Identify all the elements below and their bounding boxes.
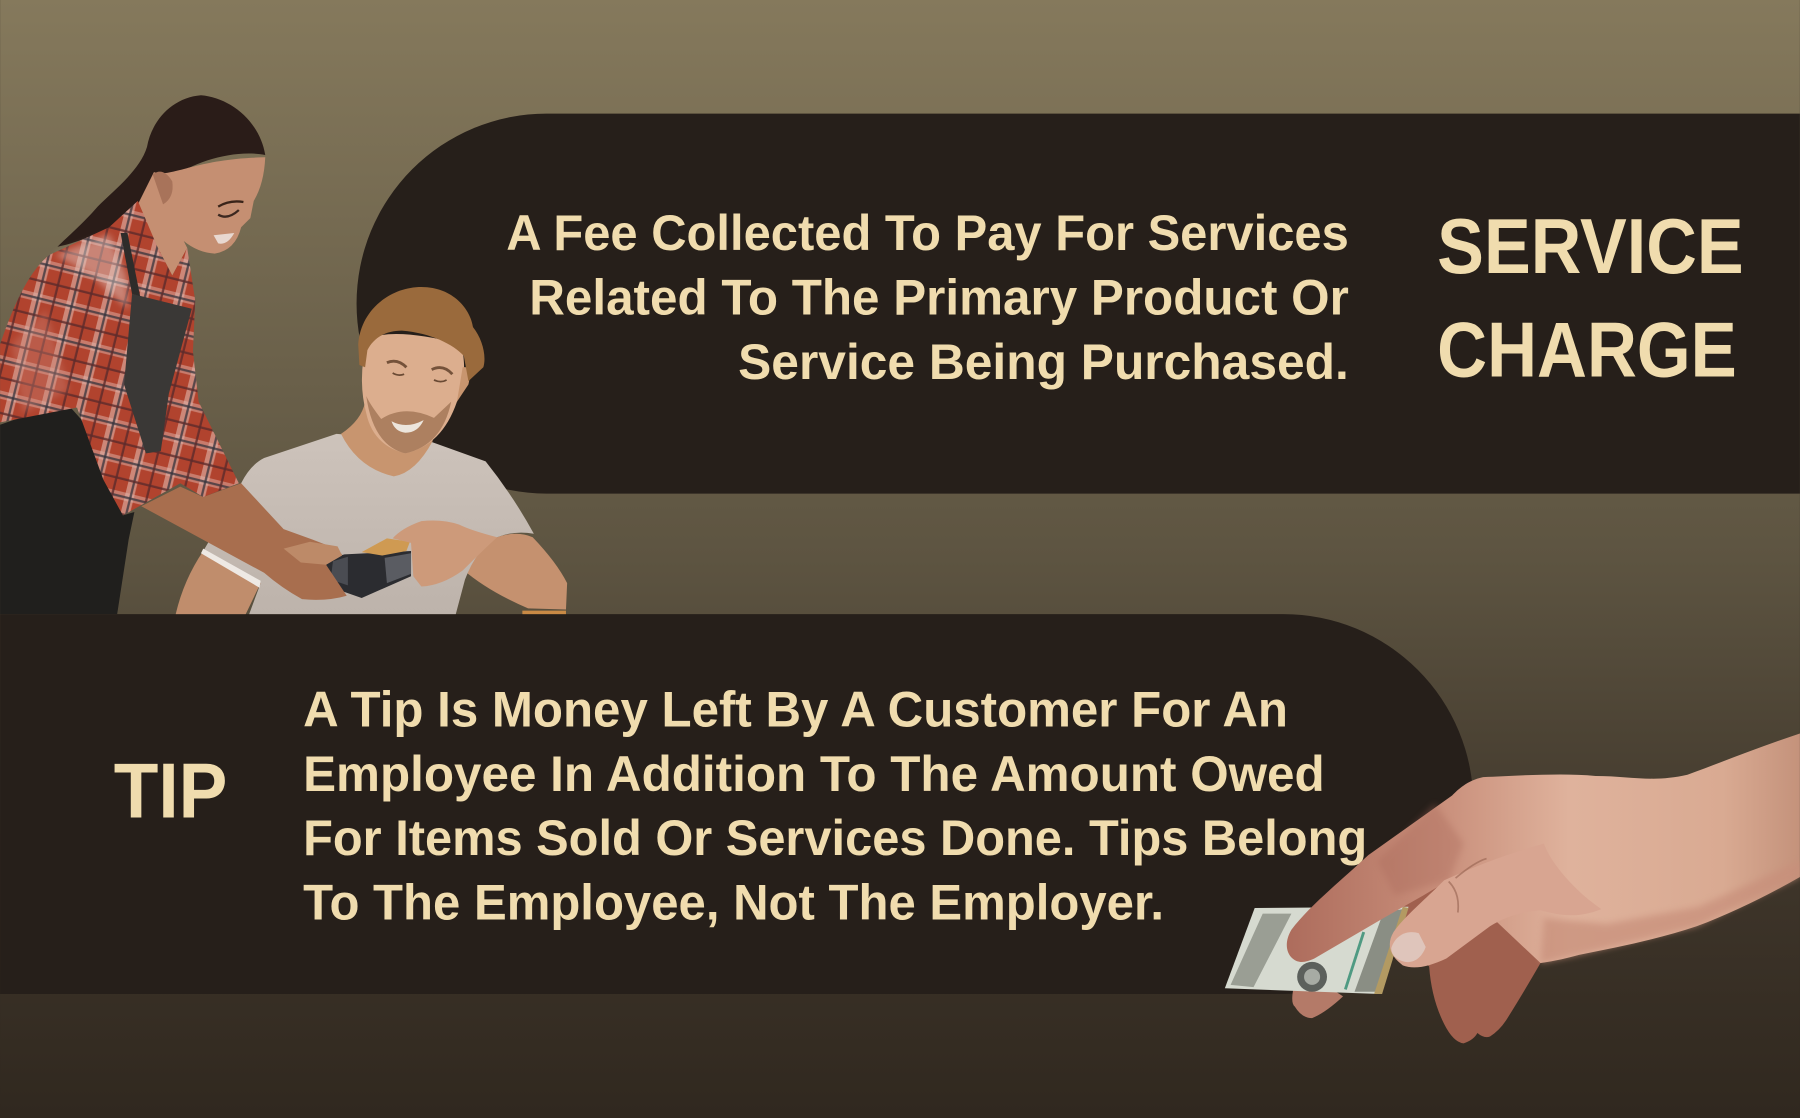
- text block: tip definition: A Tip Is Money Left By A Customer For An: [303, 681, 1288, 738]
- back of hand and index finger: [1287, 733, 1800, 967]
- apron lower: [0, 402, 134, 614]
- card reader: [312, 538, 411, 598]
- forearms: [141, 483, 347, 600]
- lower fingers: [1292, 884, 1578, 1043]
- heading: service charge: [1437, 202, 1744, 393]
- apron bib: [124, 294, 192, 453]
- text block: service charge definition: Service Being Purchased.: [738, 333, 1349, 390]
- palm shadow: [1540, 861, 1800, 963]
- ponytail and hair: [57, 95, 265, 247]
- thumb: [1390, 844, 1601, 967]
- text block: tip definition: [303, 681, 1367, 930]
- text block: service charge definition: A Fee Collected To Pay For Services: [506, 204, 1349, 261]
- text block: tip definition: To The Employee, Not The Employer.: [303, 873, 1164, 930]
- man's hand: [393, 520, 497, 587]
- thumbnail: [1391, 932, 1426, 962]
- heading: service charge: CHARGE: [1437, 305, 1737, 393]
- panel: service charge: [357, 114, 1800, 494]
- text block: tip definition: For Items Sold Or Services Done. Tips Belong: [303, 809, 1367, 866]
- face: [138, 157, 265, 275]
- dollar bill: [1225, 907, 1408, 994]
- photo: hand holding dollar bill: [1225, 733, 1800, 1043]
- heading: tip: TIP: [114, 746, 227, 834]
- text block: service charge definition: [506, 204, 1349, 390]
- shoulder highlight: [55, 234, 129, 310]
- panel: tip: [0, 614, 1473, 994]
- text block: service charge definition: Related To The Primary Product Or: [529, 269, 1349, 326]
- knuckle shading: [1378, 803, 1464, 895]
- text block: tip definition: Employee In Addition To The Amount Owed: [303, 745, 1325, 802]
- heading: service charge: SERVICE: [1437, 202, 1744, 290]
- man seated: [176, 287, 567, 614]
- woman server: [0, 95, 347, 614]
- plaid shirt: [0, 201, 239, 515]
- photo: customer and server with card reader: [0, 95, 567, 614]
